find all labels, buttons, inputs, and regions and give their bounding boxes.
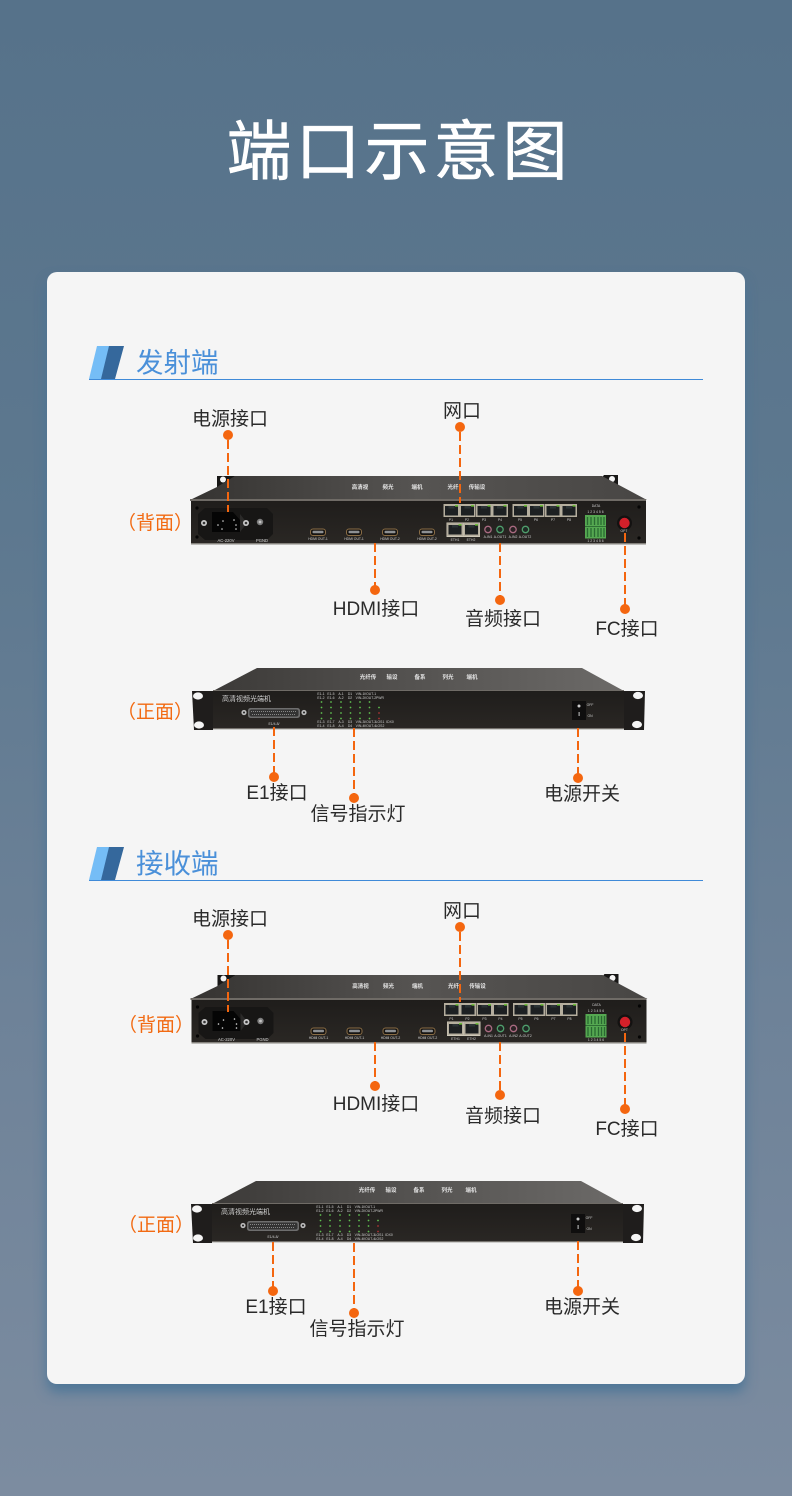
device: transmitter rear: HDMI OUT-1 bbox=[344, 537, 364, 541]
device: receiver front: E1-1 bbox=[316, 1205, 324, 1209]
device: receiver front: D2 bbox=[347, 1209, 351, 1213]
device: transmitter rear: DATA bbox=[592, 504, 601, 508]
callout: 电源接口: 电源接口 bbox=[192, 908, 268, 930]
device: transmitter front: 输设 bbox=[386, 673, 398, 681]
label: （正面）: （正面） bbox=[117, 701, 193, 723]
device: transmitter rear: P1 bbox=[449, 518, 453, 522]
device: transmitter front: VOUT-1 bbox=[364, 692, 376, 696]
device: transmitter rear: ETH1 bbox=[451, 538, 459, 542]
device: receiver rear: A-IN1 bbox=[484, 1034, 493, 1038]
device: receiver rear: HDMI OUT-2 bbox=[381, 1036, 400, 1040]
callout: HDMI接口 bbox=[333, 543, 419, 620]
device: receiver front: LOS2 bbox=[375, 1237, 383, 1241]
section heading: 发射端: 发射端 bbox=[136, 347, 218, 378]
device: transmitter rear: P7 bbox=[551, 518, 555, 522]
callout: 电源开关 bbox=[544, 728, 620, 805]
device: transmitter front: 端机 bbox=[466, 673, 478, 681]
device: receiver front: D1 bbox=[347, 1205, 351, 1209]
device: receiver rear: P7 bbox=[551, 1017, 556, 1021]
device: transmitter front: VOUT-4 bbox=[364, 724, 376, 728]
device: transmitter rear: ETH2 bbox=[467, 538, 475, 542]
device: receiver front: 端机 bbox=[465, 1186, 477, 1194]
callout: 网口 bbox=[443, 901, 481, 1002]
device: receiver rear: ETH2 bbox=[467, 1037, 476, 1041]
device: transmitter rear: A-IN1 bbox=[484, 535, 492, 539]
device: receiver rear: A-IN2 bbox=[509, 1034, 518, 1038]
device: receiver rear: 端机 bbox=[412, 982, 423, 990]
device: receiver front: VOUT-4 bbox=[363, 1237, 375, 1241]
device: transmitter front: 列光 bbox=[442, 673, 454, 681]
section heading: 发射端 bbox=[89, 346, 703, 380]
device: transmitter rear: 高清视 bbox=[352, 483, 369, 491]
callout: 电源开关 bbox=[544, 1241, 620, 1318]
device: transmitter rear: P3 bbox=[482, 518, 486, 522]
callout: FC接口: FC接口 bbox=[595, 618, 659, 640]
device: receiver front: 备系 bbox=[413, 1186, 425, 1194]
label: （背面）: （背面） bbox=[117, 512, 193, 534]
label: （正面）: （正面） bbox=[118, 1214, 194, 1236]
device: transmitter rear: P8 bbox=[567, 518, 571, 522]
device: transmitter front: E1-2 bbox=[317, 696, 325, 700]
device: receiver rear: 123456 bbox=[588, 1009, 605, 1013]
device: receiver rear: P4 bbox=[498, 1017, 503, 1021]
device: receiver front: IDX0 bbox=[385, 1233, 393, 1237]
device: transmitter rear: P2 bbox=[465, 518, 469, 522]
device: receiver rear: ETH1 bbox=[451, 1037, 460, 1041]
device: receiver front: VOUT-2 bbox=[363, 1209, 375, 1213]
callout: 网口: 网口 bbox=[443, 901, 481, 922]
callout: E1接口 bbox=[246, 727, 308, 804]
callout: FC接口: FC接口 bbox=[595, 1118, 659, 1140]
device: transmitter rear: 传输设 bbox=[469, 483, 486, 491]
device: receiver rear: OPT bbox=[621, 1028, 628, 1032]
callout: 音频接口 bbox=[465, 1042, 541, 1127]
device: transmitter front: LOS1 bbox=[376, 720, 384, 724]
callout: 网口: 网口 bbox=[443, 401, 481, 422]
device: receiver front: PWR bbox=[375, 1209, 384, 1213]
device: receiver rear: A-OUT2 bbox=[519, 1034, 532, 1038]
device: transmitter front: LOS2 bbox=[376, 724, 384, 728]
device: receiver front: VOUT-3 bbox=[363, 1233, 375, 1237]
device: receiver rear: P2 bbox=[465, 1017, 470, 1021]
device: receiver rear: P5 bbox=[518, 1017, 523, 1021]
device: transmitter rear: OPT bbox=[621, 529, 627, 533]
device: transmitter front: D2 bbox=[348, 696, 352, 700]
device: transmitter rear: 端机 bbox=[411, 483, 423, 491]
device: transmitter front: VIN-4 bbox=[356, 724, 364, 728]
callout: 音频接口 bbox=[465, 543, 541, 630]
callout: HDMI接口 bbox=[333, 1042, 419, 1115]
callout: 信号指示灯 bbox=[309, 1243, 405, 1340]
callout: 信号指示灯: 信号指示灯 bbox=[309, 1318, 405, 1340]
device: transmitter rear: HDMI OUT-1 bbox=[308, 537, 328, 541]
device: receiver front: 列光 bbox=[441, 1186, 453, 1194]
device: transmitter rear: PGND bbox=[256, 538, 268, 543]
device: transmitter rear: HDMI OUT-2 bbox=[380, 537, 400, 541]
device: transmitter rear: P6 bbox=[534, 518, 538, 522]
device: transmitter rear bbox=[190, 475, 647, 544]
device: transmitter rear: 123456 bbox=[587, 539, 605, 543]
device: transmitter front: 光纤传 bbox=[360, 673, 377, 681]
callout: 网口 bbox=[443, 401, 481, 503]
device: receiver rear: P6 bbox=[534, 1017, 539, 1021]
callout: E1接口: E1接口 bbox=[246, 782, 308, 804]
device: receiver rear bbox=[190, 974, 648, 1044]
device: receiver front: E1-5 bbox=[326, 1205, 334, 1209]
device: transmitter rear: P5 bbox=[518, 518, 522, 522]
callout: 电源接口: 电源接口 bbox=[192, 408, 268, 430]
device: receiver front: A-3 bbox=[337, 1233, 343, 1237]
device: transmitter rear: AC-220V bbox=[218, 538, 235, 543]
device: transmitter front: VOUT-3 bbox=[364, 720, 376, 724]
device: receiver front bbox=[191, 1181, 644, 1243]
section heading: 接收端 bbox=[89, 847, 703, 881]
device: transmitter front: E1-7 bbox=[327, 720, 335, 724]
device: transmitter rear: HDMI OUT-2 bbox=[417, 537, 437, 541]
callout: FC接口 bbox=[595, 1033, 659, 1140]
device: receiver rear: P8 bbox=[567, 1017, 572, 1021]
device: transmitter front: A-2 bbox=[338, 696, 344, 700]
device: transmitter front: E1-5 bbox=[327, 692, 335, 696]
device: receiver front: 输设 bbox=[385, 1186, 397, 1194]
device: receiver front: A-4 bbox=[337, 1237, 343, 1241]
device: transmitter front bbox=[192, 668, 645, 730]
device: transmitter rear: 123456 bbox=[587, 510, 605, 514]
device: receiver rear: 光纤 bbox=[448, 982, 459, 990]
device: receiver rear: 频光 bbox=[383, 982, 394, 990]
device: transmitter front: E1-8 bbox=[327, 724, 335, 728]
label: （背面）: （背面） bbox=[118, 1014, 194, 1036]
callout: E1接口: E1接口 bbox=[245, 1296, 307, 1318]
title: 端口示意图 bbox=[226, 115, 572, 188]
callout: 音频接口: 音频接口 bbox=[465, 1105, 541, 1127]
device: receiver rear: 传输设 bbox=[469, 982, 486, 990]
device: receiver front: OFF bbox=[586, 1216, 592, 1220]
callout: 信号指示灯: 信号指示灯 bbox=[310, 803, 406, 825]
device: transmitter rear: A-IN2 bbox=[509, 535, 517, 539]
device: receiver front: VOUT-1 bbox=[363, 1205, 375, 1209]
callout: 音频接口: 音频接口 bbox=[465, 608, 541, 630]
device: receiver rear: 高清视 bbox=[352, 982, 369, 990]
device: transmitter front: A-3 bbox=[338, 720, 344, 724]
device: transmitter rear: A-OUT2 bbox=[519, 535, 531, 539]
device: receiver front: LOS1 bbox=[375, 1233, 383, 1237]
callout: 电源开关: 电源开关 bbox=[544, 1296, 620, 1318]
device: transmitter front: ON bbox=[587, 714, 593, 718]
callout: HDMI接口: HDMI接口 bbox=[333, 598, 419, 620]
device: transmitter rear: P4 bbox=[498, 518, 502, 522]
callout: FC接口 bbox=[595, 533, 659, 640]
device: transmitter front: E1-3 bbox=[317, 720, 325, 724]
device: transmitter rear: A-OUT1 bbox=[494, 535, 506, 539]
device: transmitter front: IDX0 bbox=[386, 720, 394, 724]
device: transmitter front: OFF bbox=[587, 703, 593, 707]
device: transmitter front: VIN-3 bbox=[356, 720, 364, 724]
device: transmitter front: 高清视频光端机 bbox=[222, 694, 271, 703]
callout: HDMI接口: HDMI接口 bbox=[333, 1093, 419, 1115]
device: transmitter front: E1/4-8/ bbox=[269, 722, 280, 726]
panel: white card bbox=[47, 272, 745, 1384]
device: receiver rear: P1 bbox=[449, 1017, 454, 1021]
device: receiver rear: P3 bbox=[482, 1017, 487, 1021]
device: transmitter front: D3 bbox=[348, 720, 352, 724]
device: transmitter front: 备系 bbox=[414, 673, 426, 681]
device: receiver rear: 123456 bbox=[588, 1038, 605, 1042]
device: receiver front: VIN-3 bbox=[355, 1233, 363, 1237]
device: transmitter rear: 频光 bbox=[382, 483, 394, 491]
device: receiver front: VIN-4 bbox=[355, 1237, 363, 1241]
device: receiver rear: PGND bbox=[256, 1037, 269, 1042]
device: transmitter front: E1-6 bbox=[327, 696, 335, 700]
device: transmitter front: VOUT-2 bbox=[364, 696, 376, 700]
device: receiver front: D3 bbox=[347, 1233, 351, 1237]
device: receiver front: VIN-1 bbox=[355, 1205, 363, 1209]
device: receiver front: A-2 bbox=[337, 1209, 343, 1213]
device: receiver front: ON bbox=[586, 1227, 592, 1231]
device: receiver rear: HDMI OUT-2 bbox=[418, 1036, 437, 1040]
device: transmitter front: E1-4 bbox=[317, 724, 325, 728]
callout: E1接口 bbox=[245, 1242, 307, 1318]
device: transmitter front: A-1 bbox=[338, 692, 344, 696]
device: receiver front: E1-7 bbox=[326, 1233, 334, 1237]
device: receiver front: D4 bbox=[347, 1237, 351, 1241]
device: receiver front: VIN-2 bbox=[355, 1209, 363, 1213]
device: transmitter front: D4 bbox=[348, 724, 352, 728]
device: transmitter front: D1 bbox=[348, 692, 352, 696]
device: transmitter front: VIN-1 bbox=[356, 692, 364, 696]
section heading: 接收端: 接收端 bbox=[136, 848, 218, 879]
device: transmitter front: E1-1 bbox=[317, 692, 325, 696]
device: transmitter front: VIN-2 bbox=[356, 696, 364, 700]
device: transmitter rear: 光纤 bbox=[447, 483, 459, 491]
callout: 电源开关: 电源开关 bbox=[544, 783, 620, 805]
device: receiver front: E1-8 bbox=[326, 1237, 334, 1241]
callout: 电源接口 bbox=[192, 408, 268, 512]
device: transmitter front: A-4 bbox=[338, 724, 344, 728]
device: transmitter front: PWR bbox=[376, 696, 385, 700]
callout: 电源接口 bbox=[192, 908, 268, 1012]
device: receiver rear: AC-220V bbox=[218, 1037, 235, 1042]
device: receiver front: E1-4 bbox=[316, 1237, 324, 1241]
device: receiver front: A-1 bbox=[337, 1205, 343, 1209]
device: receiver front: 光纤传 bbox=[359, 1186, 376, 1194]
device: receiver rear: HDMI OUT-1 bbox=[345, 1036, 364, 1040]
device: receiver front: E1-3 bbox=[316, 1233, 324, 1237]
device: receiver rear: DATA bbox=[592, 1003, 602, 1007]
device: receiver front: E1/4-8/ bbox=[268, 1235, 279, 1239]
device: receiver front: 高清视频光端机 bbox=[221, 1207, 270, 1216]
device: receiver front: E1-6 bbox=[326, 1209, 334, 1213]
device: receiver rear: A-OUT1 bbox=[494, 1034, 507, 1038]
callout: 信号指示灯 bbox=[310, 728, 406, 825]
device: receiver rear: HDMI OUT-1 bbox=[309, 1036, 328, 1040]
device: receiver front: E1-2 bbox=[316, 1209, 324, 1213]
